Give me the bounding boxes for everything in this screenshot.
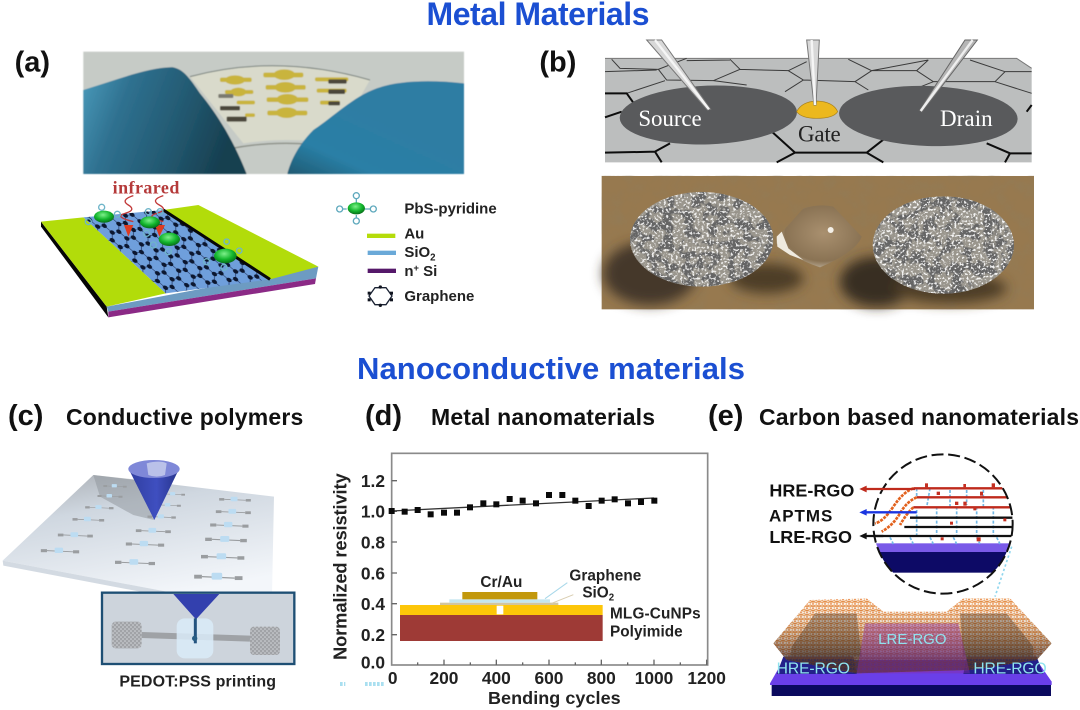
panel (a): flexible graphene photodetector bbox=[15, 47, 497, 317]
panel (b): graphene transistor bbox=[539, 40, 1034, 309]
chart: normalized resistivity vs bending cycles bbox=[330, 453, 726, 708]
x axis tick labels bbox=[388, 668, 726, 688]
infrared waves and label: infrared bbox=[113, 178, 179, 198]
label (a): (a) bbox=[15, 47, 50, 79]
small cyan marks bbox=[340, 678, 385, 690]
arrows and labels bbox=[769, 481, 917, 547]
diagram: RGO layered device bbox=[769, 454, 1052, 696]
title: Nanoconductive materials: Nanoconductive materials bbox=[357, 351, 745, 386]
legend bbox=[337, 193, 497, 307]
heading: Metal nanomaterials: Metal nanomaterials bbox=[431, 404, 655, 430]
RGO mesh layers: HRE-RGO bbox=[777, 660, 850, 677]
y axis tick labels bbox=[361, 471, 385, 673]
x axis tick labels: 0 bbox=[388, 668, 397, 688]
diagram: source gate drain on graphene bbox=[605, 40, 1032, 162]
legend: Si bbox=[419, 263, 437, 280]
label (e): (e) bbox=[708, 400, 743, 432]
axis title: Bending cycles: Bending cycles bbox=[488, 688, 621, 708]
arrows and labels: APTMS bbox=[769, 507, 832, 526]
label (c): (c) bbox=[8, 400, 43, 432]
RGO mesh layers bbox=[773, 598, 1052, 677]
x axis tick labels: 1200 bbox=[687, 668, 726, 688]
photo: bent device held by gloves bbox=[83, 52, 464, 174]
legend: PbS-pyridine bbox=[404, 200, 497, 217]
inset: layered device cross-section: Polyimide bbox=[610, 624, 683, 641]
y axis tick labels: 1.2 bbox=[361, 471, 385, 491]
legend: Au bbox=[404, 226, 424, 243]
inset: layered device cross-section: 2 bbox=[609, 592, 614, 603]
caption: PEDOT:PSS printing: PEDOT:PSS printing bbox=[119, 674, 276, 691]
x axis tick labels: 800 bbox=[587, 668, 616, 688]
data points and trend line bbox=[389, 492, 657, 517]
heading: Conductive polymers: Conductive polymers bbox=[66, 404, 303, 430]
panel (c): conductive polymers bbox=[3, 400, 303, 691]
inset: layered device cross-section bbox=[400, 567, 701, 641]
inset: PEDOT:PSS droplet on device bbox=[102, 593, 294, 664]
magnified circle view bbox=[870, 454, 1013, 594]
photo: printed electrodes and droplet bbox=[602, 176, 1034, 309]
x axis tick labels: 400 bbox=[482, 668, 511, 688]
PbS-pyridine particles on device bbox=[85, 204, 242, 270]
y axis tick labels: 0.8 bbox=[361, 532, 385, 552]
legend: Graphene bbox=[404, 288, 474, 305]
y axis tick labels: 0.4 bbox=[361, 594, 385, 614]
x axis tick labels: 200 bbox=[430, 668, 458, 688]
panel (d): metal nanomaterials bbox=[365, 400, 655, 432]
printing sheet with devices and nozzle bbox=[3, 460, 274, 600]
infrared waves and label bbox=[113, 178, 179, 237]
diagram: source gate drain on graphene: Source bbox=[638, 106, 702, 131]
dotted connector bbox=[995, 547, 1012, 597]
y axis tick labels: 0.2 bbox=[361, 625, 385, 645]
inset: layered device cross-section: SiO bbox=[582, 584, 609, 601]
device substrate bbox=[770, 657, 1052, 696]
axis title: Normalized resistivity: Normalized resistivity bbox=[330, 473, 351, 660]
heading: Carbon based nanomaterials: Carbon based nanomaterials bbox=[759, 404, 1079, 430]
legend: 2 bbox=[430, 252, 436, 263]
diagram: source gate drain on graphene: Gate bbox=[798, 122, 841, 147]
x axis tick labels: 600 bbox=[535, 668, 563, 688]
y axis tick labels: 0.6 bbox=[361, 563, 385, 583]
plot frame and ticks bbox=[392, 453, 708, 665]
arrows and labels: LRE-RGO bbox=[769, 527, 852, 547]
inset: layered device cross-section: Cr/Au bbox=[480, 574, 522, 591]
legend: n bbox=[404, 263, 413, 280]
y axis tick labels: 1.0 bbox=[361, 502, 385, 522]
diagram: source gate drain on graphene: Drain bbox=[940, 106, 993, 131]
RGO mesh layers: HRE-RGO bbox=[973, 660, 1047, 677]
y axis tick labels: 0.0 bbox=[361, 653, 385, 673]
inset: layered device cross-section: Graphene bbox=[569, 567, 641, 584]
inset: layered device cross-section: MLG-CuNPs bbox=[610, 605, 701, 622]
label (b): (b) bbox=[539, 47, 576, 79]
x axis tick labels: 1000 bbox=[635, 668, 673, 688]
label (d): (d) bbox=[365, 400, 402, 432]
panel (e): carbon based nanomaterials bbox=[708, 400, 1079, 432]
RGO mesh layers: LRE-RGO bbox=[878, 631, 946, 648]
legend: SiO bbox=[404, 244, 430, 261]
diagram: graphene device stack bbox=[41, 205, 318, 317]
legend: + bbox=[413, 263, 419, 273]
arrows and labels: HRE-RGO bbox=[769, 481, 854, 501]
